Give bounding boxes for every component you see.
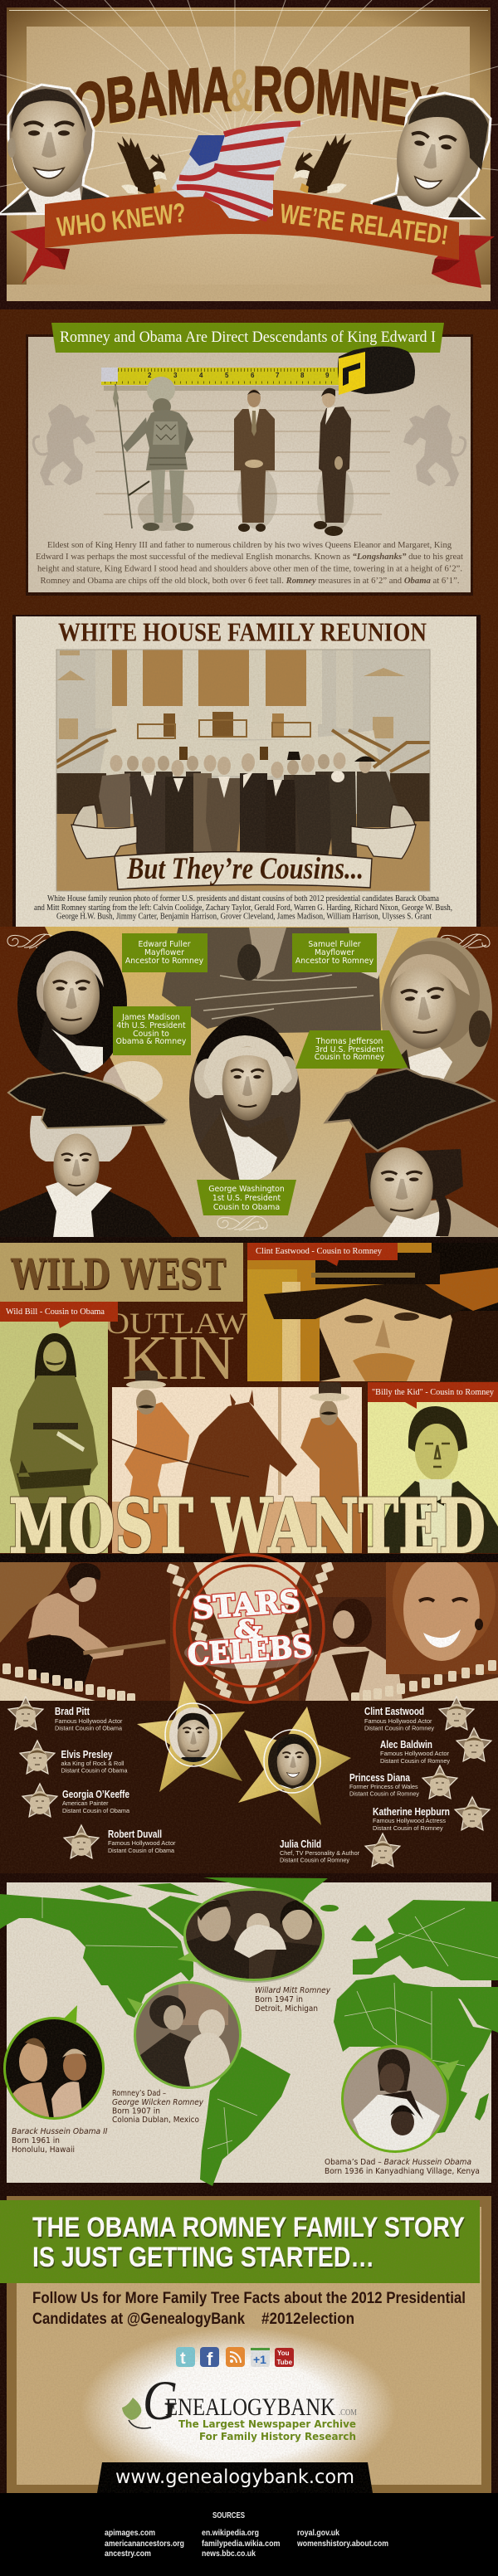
rider head: Obama with hat	[126, 1371, 166, 1415]
label: Thomas Jefferson	[295, 1030, 408, 1069]
GenealogyBank logo: The Largest Newspaper Archive	[178, 2418, 356, 2430]
celebrity: Robert Duvall: Robert Duvall	[108, 1828, 162, 1840]
celebrity: Princess Diana: Distant Cousin of Romney	[349, 1790, 419, 1797]
celebrity: Clint Eastwood: Clint Eastwood	[364, 1705, 424, 1717]
panel: Stars and Celebs	[0, 1539, 498, 1873]
panel: sources footer: SOURCES	[212, 2510, 245, 2520]
celebrity: Clint Eastwood: Distant Cousin of Romney	[364, 1724, 434, 1732]
follow text	[32, 2290, 466, 2328]
pointer: George Romney photo	[127, 1998, 143, 2014]
title: Outlaw Kin: OUTLAW	[105, 1307, 247, 1340]
GenealogyBank logo: .COM	[339, 2408, 357, 2418]
celebrity: Katherine Hepburn: Famous Hollywood Actress	[373, 1817, 446, 1824]
panel: sources footer: apimages.com	[105, 2528, 155, 2538]
label: Wild Bill	[0, 1302, 118, 1328]
celebrity: Julia Child	[280, 1833, 400, 1867]
icon: Twitter: t	[180, 2350, 186, 2368]
caption	[34, 894, 452, 921]
green heading band: IS JUST GETTING STARTED…	[32, 2242, 374, 2273]
portrait: Thomas Jefferson	[381, 937, 492, 1087]
heading banner: Romney and Obama Are Direct Descendants of King Edward I	[60, 329, 436, 346]
text: Obama Sr birth: Born 1936 in Kanyadhiang Village, Kenya	[325, 2167, 480, 2176]
badge text: Stars & Celebs: CELEBS	[187, 1629, 313, 1673]
icon: Google plus one: +1	[253, 2353, 266, 2366]
height lines	[95, 411, 390, 514]
photo oval: Romney family	[183, 1888, 325, 1983]
celebrity: Georgia O'Keeffe: Georgia O’Keeffe	[62, 1788, 129, 1800]
figure: Obama standing	[234, 389, 277, 532]
poster: Wild West title: WILD WEST	[11, 1251, 227, 1300]
panel: sources footer: royal.gov.uk	[297, 2528, 339, 2538]
panel: White House Family Reunion	[12, 615, 481, 929]
celebrity: Georgia O'Keeffe: American Painter	[62, 1799, 109, 1807]
celebrity: Georgia O'Keeffe: Distant Cousin of Obama	[62, 1807, 130, 1814]
label: James Madison: 4th U.S. President	[116, 1021, 186, 1030]
text block: King Edward description	[36, 540, 463, 586]
photo: Elvis Presley	[0, 1562, 170, 1701]
heading banner	[51, 323, 444, 353]
label: Samuel Fuller: Ancestor to Romney	[295, 957, 374, 966]
red rings	[174, 1555, 324, 1702]
badge text: Stars & Celebs	[184, 1584, 314, 1673]
GenealogyBank logo: ENEALOGYBANK	[165, 2393, 335, 2421]
label: Samuel Fuller: Samuel Fuller	[308, 940, 361, 949]
text: Mitt Romney birth: Detroit, Michigan	[255, 2004, 318, 2014]
portrait: Obama cutout	[0, 85, 108, 214]
celebrity: Clint Eastwood	[364, 1697, 474, 1732]
website tab	[97, 2462, 373, 2493]
celebrity: Princess Diana	[349, 1765, 457, 1799]
ribbon: But They're Cousins	[71, 805, 416, 889]
photo: Katherine Hepburn	[299, 1597, 403, 1701]
celebrity: Julia Child: Julia Child	[280, 1838, 321, 1850]
tape measure: 2	[148, 372, 152, 379]
text block: King Edward description: Edward I was perhaps the most successful of the medieval English monarchs. Known as “Longshanks” due to his great	[36, 552, 463, 562]
label: Edward Fuller: Mayflower	[144, 948, 184, 957]
eagle left	[117, 136, 167, 194]
label: Thomas Jefferson: Thomas Jefferson	[315, 1037, 383, 1046]
label: Billy the Kid	[368, 1382, 498, 1409]
icon: YouTube: Tube	[277, 2359, 293, 2366]
tape measure: 4	[199, 372, 203, 379]
celebrity: Robert Duvall: Famous Hollywood Actor	[108, 1839, 176, 1847]
celebrity: Katherine Hepburn: Katherine Hepburn	[373, 1805, 450, 1818]
badge text: Stars & Celebs: &	[235, 1615, 261, 1644]
label: Samuel Fuller	[292, 933, 377, 972]
text block: King Edward description: height and stature, King Edward I stood head and shoulders above other men of the time, towering in at a height of 6’2”.	[37, 564, 462, 574]
portrait: Obama in tricorn hat	[0, 1073, 173, 1238]
portrait: George Washington	[189, 1010, 300, 1186]
photo: White House with presidents	[56, 650, 430, 892]
portrait: James Madison	[17, 931, 127, 1079]
heading: WHITE HOUSE FAMILY REUNION	[58, 617, 427, 647]
panel: sources footer: americanancestors.org	[105, 2539, 184, 2549]
main title: Obama & Romney: ROMNEY	[254, 66, 439, 126]
pointer: Kenya photo	[438, 2060, 459, 2081]
main title: Obama & Romney: OBAMA	[82, 82, 231, 128]
tan V background	[45, 927, 442, 1238]
text: Mitt Romney birth	[255, 1986, 331, 2014]
text block: King Edward description: Romney and Obama are chips off the old block, both over 6 feet tall. Romney measures in at 6’2” and Obama at 6’1”.	[40, 576, 460, 586]
portrait: Romney in tricorn hat	[320, 1069, 498, 1238]
decorative swirl top left	[7, 934, 57, 948]
badge text: Stars & Celebs: STARS	[192, 1584, 301, 1626]
text block: King Edward description: Eldest son of King Henry III and father to numerous children by his two wives Queens Eleanor and Margaret, King	[47, 540, 452, 550]
green heading band	[0, 2200, 480, 2283]
GenealogyBank logo	[122, 2369, 357, 2442]
label: James Madison: Cousin to	[133, 1030, 169, 1039]
panel: sources footer	[0, 2493, 498, 2576]
rider head: Romney with hat	[310, 1382, 349, 1425]
celebrity: Brad Pitt: Distant Cousin of Obama	[55, 1724, 123, 1732]
icon: YouTube	[275, 2348, 294, 2367]
celebrity: Alec Baldwin	[380, 1728, 491, 1765]
label: Thomas Jefferson: Cousin to Romney	[315, 1053, 385, 1062]
section background: brown	[0, 309, 498, 929]
website tab: www.genealogybank.com	[115, 2466, 354, 2488]
main title: Obama & Romney: OBAMA	[76, 66, 232, 127]
celebrity: Julia Child: Distant Cousin of Romney	[280, 1857, 349, 1863]
photo oval: George Romney	[134, 1981, 242, 2091]
text: George Romney birth: Born 1907 in	[112, 2107, 160, 2116]
text: Mitt Romney birth: Willard Mitt Romney	[255, 1986, 331, 1995]
photo oval: Barack Obama Sr	[341, 2045, 449, 2153]
label: Samuel Fuller: Mayflower	[315, 948, 354, 957]
tape measure: 7	[276, 372, 280, 379]
decorative swirl bottom	[217, 1216, 267, 1230]
badge text: Stars & Celebs: CELEBS	[187, 1629, 313, 1673]
tape measure: 8	[300, 372, 305, 379]
label: James Madison: Obama & Romney	[116, 1037, 187, 1046]
eagle right	[293, 134, 352, 193]
text: Barack Obama birth: Honolulu, Hawaii	[12, 2145, 75, 2155]
caption: George H.W. Bush, Jimmy Carter, Benjamin Harrison, Grover Cleveland, James Madison, William Harrison, Ulysses S. Grant	[56, 913, 432, 921]
poster: Wild West title	[0, 1243, 243, 1302]
celebrity: Brad Pitt	[8, 1697, 123, 1732]
GenealogyBank logo: G	[143, 2369, 178, 2432]
tape measure	[101, 346, 415, 395]
celebrity: Robert Duvall	[64, 1825, 176, 1858]
label: Clint Eastwood: Clint Eastwood - Cousin to Romney	[256, 1246, 382, 1256]
icon: YouTube: You	[277, 2350, 290, 2357]
photo oval: Barack Obama child	[3, 2017, 105, 2120]
pointer: Obama photo	[64, 2005, 77, 2022]
tape measure: 5	[225, 372, 229, 379]
ribbon: But They're Cousins: But They’re Cousins...	[126, 852, 364, 886]
photo: Wild Bill	[0, 1322, 108, 1553]
celebrity: Princess Diana: Former Princess of Wales	[349, 1783, 418, 1790]
icon: Facebook: f	[207, 2349, 213, 2369]
poster: Wild West title: WILD WEST	[10, 1249, 226, 1298]
label: Edward Fuller	[122, 933, 208, 972]
text: Barack Obama birth: Born 1961 in	[12, 2136, 60, 2145]
follow text: #2012election	[261, 2311, 354, 2328]
panel: sources footer: ancestry.com	[105, 2549, 151, 2559]
icon: Twitter	[176, 2347, 195, 2368]
label: George Washington: 1st U.S. President	[212, 1194, 281, 1203]
text: George Romney birth: Colonia Dublan, Mexico	[112, 2116, 199, 2125]
figure: Romney standing	[314, 388, 354, 536]
tape measure: 9	[325, 372, 330, 379]
panel: title header	[0, 0, 498, 301]
panel: presidents and Mayflower ancestors	[0, 927, 498, 1238]
celebrity: Brad Pitt: Famous Hollywood Actor	[55, 1717, 123, 1725]
text: George Romney birth	[112, 2089, 204, 2125]
green heading band: IS JUST GETTING STARTED…	[33, 2243, 375, 2275]
label: James Madison	[113, 1006, 191, 1055]
celebrity: Georgia O'Keeffe	[22, 1784, 130, 1817]
label: Wild Bill: Wild Bill - Cousin to Obama	[6, 1307, 105, 1317]
follow text: Candidates at @GenealogyBank	[32, 2311, 245, 2328]
pointer: Romney photo	[178, 1952, 197, 1962]
label: Clint Eastwood	[247, 1243, 398, 1266]
badge text: Stars & Celebs: STARS	[192, 1584, 301, 1626]
Mayflower ship engraving	[162, 928, 398, 1033]
text: Obama Sr birth: Obama’s Dad – Barack Hussein Obama	[325, 2158, 471, 2167]
celebrity: Brad Pitt: Brad Pitt	[55, 1705, 90, 1717]
panel: Wild West outlaw kin	[0, 1237, 498, 1570]
label: Edward Fuller: Ancestor to Romney	[125, 957, 204, 966]
tape measure: 6	[251, 372, 255, 379]
tape measure: 3	[173, 372, 178, 379]
portrait: Romney cutout	[372, 93, 491, 218]
celebrity: Alec Baldwin: Alec Baldwin	[380, 1738, 432, 1751]
lanterns	[179, 747, 268, 760]
title: Outlaw Kin	[105, 1307, 247, 1393]
group of presidents	[99, 752, 400, 858]
icon: leaf	[122, 2398, 141, 2420]
lion crest right	[403, 405, 466, 486]
celebrity: Elvis Presley: aka King of Rock & Roll	[61, 1760, 124, 1767]
panel: King Edward height chart	[26, 323, 473, 596]
icon: RSS	[226, 2347, 245, 2367]
panel: closing call to action	[0, 2196, 491, 2493]
celebrity: Elvis Presley: Distant Cousin of Obama	[61, 1767, 128, 1774]
text: George Romney birth: George Wilcken Romney	[112, 2098, 204, 2107]
film strips	[0, 1561, 498, 1704]
label: George Washington	[197, 1180, 296, 1215]
sunburst rays	[0, 0, 498, 187]
glow behind logo	[81, 2327, 396, 2493]
celebrity: Alec Baldwin: Famous Hollywood Actor	[380, 1750, 450, 1757]
badge text: Stars & Celebs: &	[235, 1615, 261, 1644]
main title: Obama & Romney: &	[226, 58, 253, 124]
main title: Obama & Romney	[76, 58, 439, 128]
panel: sources footer: familypedia.wikia.com	[202, 2539, 281, 2549]
caption: White House family reunion photo of former U.S. presidents and distant cousins of both 2012 presidential candidates Barack Obama	[47, 894, 439, 903]
celebrity: Elvis Presley	[20, 1741, 128, 1774]
lion crest left	[33, 404, 95, 485]
celebrity: Katherine Hepburn: Distant Cousin of Romney	[373, 1824, 443, 1832]
photo: Billy the Kid	[368, 1402, 498, 1553]
text: Obama Sr birth	[325, 2158, 480, 2176]
label: Edward Fuller: Edward Fuller	[138, 940, 191, 949]
banner	[45, 190, 459, 260]
gold star: Obama	[137, 1681, 245, 1792]
main title: Obama & Romney: ROMNEY	[256, 75, 438, 128]
icon: American flag	[172, 120, 305, 222]
panel: world map of birthplaces	[0, 1873, 498, 2196]
map continents	[0, 1877, 498, 2186]
title: Outlaw Kin: KIN	[122, 1323, 235, 1393]
ribbon tails	[10, 226, 495, 288]
panel: sources footer: news.bbc.co.uk	[202, 2549, 256, 2559]
label: Thomas Jefferson: 3rd U.S. President	[315, 1045, 384, 1054]
celebrity: Alec Baldwin: Distant Cousin of Romney	[380, 1757, 450, 1765]
text: George Romney birth: Romney’s Dad –	[112, 2089, 166, 2098]
panel: sources footer: womenshistory.about.com	[296, 2539, 388, 2549]
lower brown panel	[0, 1701, 498, 1873]
text: Barack Obama birth: Barack Hussein Obama II	[12, 2127, 108, 2136]
text: Mitt Romney birth: Born 1947 in	[255, 1995, 303, 2004]
photo: Princess Diana	[386, 1562, 498, 1674]
text: Barack Obama birth	[12, 2127, 108, 2155]
celebrity: Clint Eastwood: Famous Hollywood Actor	[364, 1717, 432, 1725]
icon: Google plus one	[251, 2348, 270, 2367]
gold star: Romney	[238, 1707, 351, 1825]
panel: sources footer: en.wikipedia.org	[202, 2528, 259, 2538]
celebrity: Julia Child: Chef, TV Personality & Author	[280, 1849, 360, 1857]
label: James Madison: James Madison	[121, 1013, 180, 1022]
banner text: who knew: WHO KNEW?	[56, 197, 188, 242]
photo: riders and horse	[112, 1371, 362, 1553]
celebrity: Elvis Presley: Elvis Presley	[61, 1748, 113, 1760]
celebrity: Princess Diana: Princess Diana	[349, 1771, 411, 1784]
decorative swirl top right	[440, 934, 490, 948]
social icons	[176, 2347, 294, 2369]
photo: Clint Eastwood	[247, 1243, 498, 1381]
celebrity: Robert Duvall: Distant Cousin of Obama	[108, 1847, 175, 1854]
celebrity: Katherine Hepburn	[373, 1797, 490, 1832]
icon: Facebook	[200, 2347, 219, 2369]
label: George Washington: George Washington	[208, 1185, 285, 1194]
figure: King Edward knight	[113, 377, 194, 531]
label: George Washington: Cousin to Obama	[213, 1203, 280, 1212]
GenealogyBank logo: For Family History Research	[199, 2431, 356, 2442]
